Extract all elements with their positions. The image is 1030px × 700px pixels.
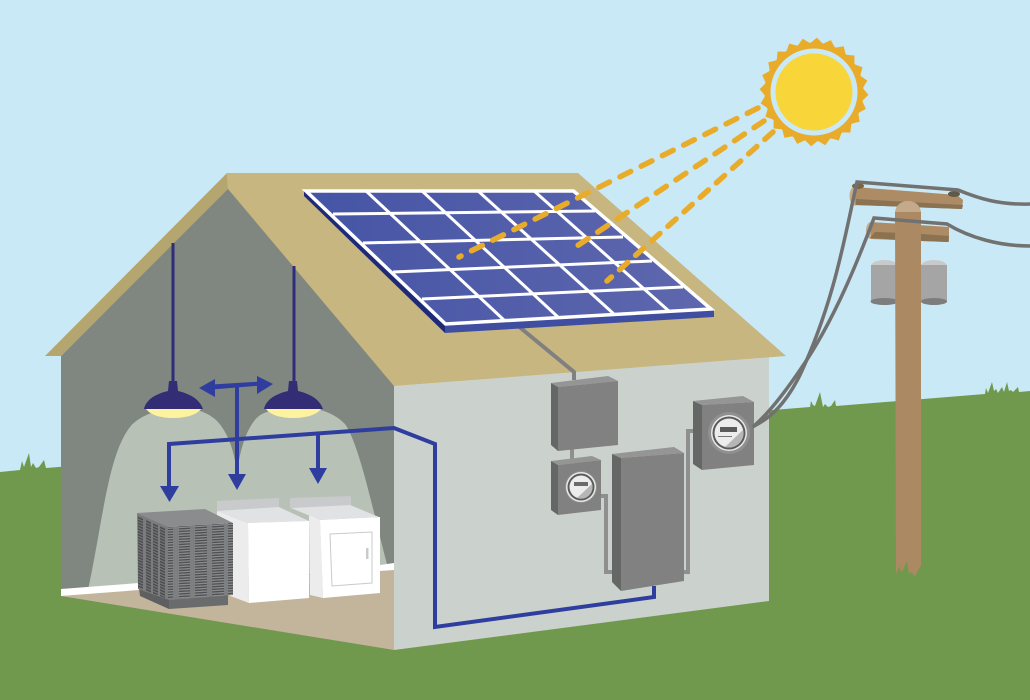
lamp light cones [88,407,388,592]
panel conduit [517,325,574,380]
power lines [754,182,1030,426]
sun rays [459,108,773,281]
roof [227,173,786,386]
utility pole [850,183,963,576]
transformer left [870,260,898,305]
interior back wall [61,188,394,650]
small meter [551,456,601,515]
pole cap [895,201,921,212]
arrow down to AC [160,486,179,502]
hanging lamp left [144,243,203,418]
roof overhang [45,173,228,356]
upper crossarm [850,183,963,209]
solar panel [304,190,714,380]
air conditioner [137,509,233,609]
hanging lamp right [264,266,323,418]
ground with grass [0,382,1030,700]
main electrical panel [612,447,684,591]
dryer handle [366,548,368,559]
inverter box [551,376,618,451]
blue power lines [160,376,654,627]
dryer door [330,532,372,586]
arrow down to washer [228,387,246,490]
right exterior wall [394,357,769,650]
dryer [290,496,380,598]
conduits between boxes [572,431,703,572]
house [45,173,786,650]
utility meter [693,396,754,470]
floor [61,568,394,650]
sun [759,37,869,147]
arrow to lamps [199,376,273,397]
transformer right [921,260,947,305]
baseboards [61,563,394,596]
arrow down to dryer [309,435,327,484]
small meter dial [565,471,597,503]
utility meter dial [708,412,750,454]
lower crossarm [866,222,949,242]
pole post [895,212,921,576]
washer [217,498,309,603]
